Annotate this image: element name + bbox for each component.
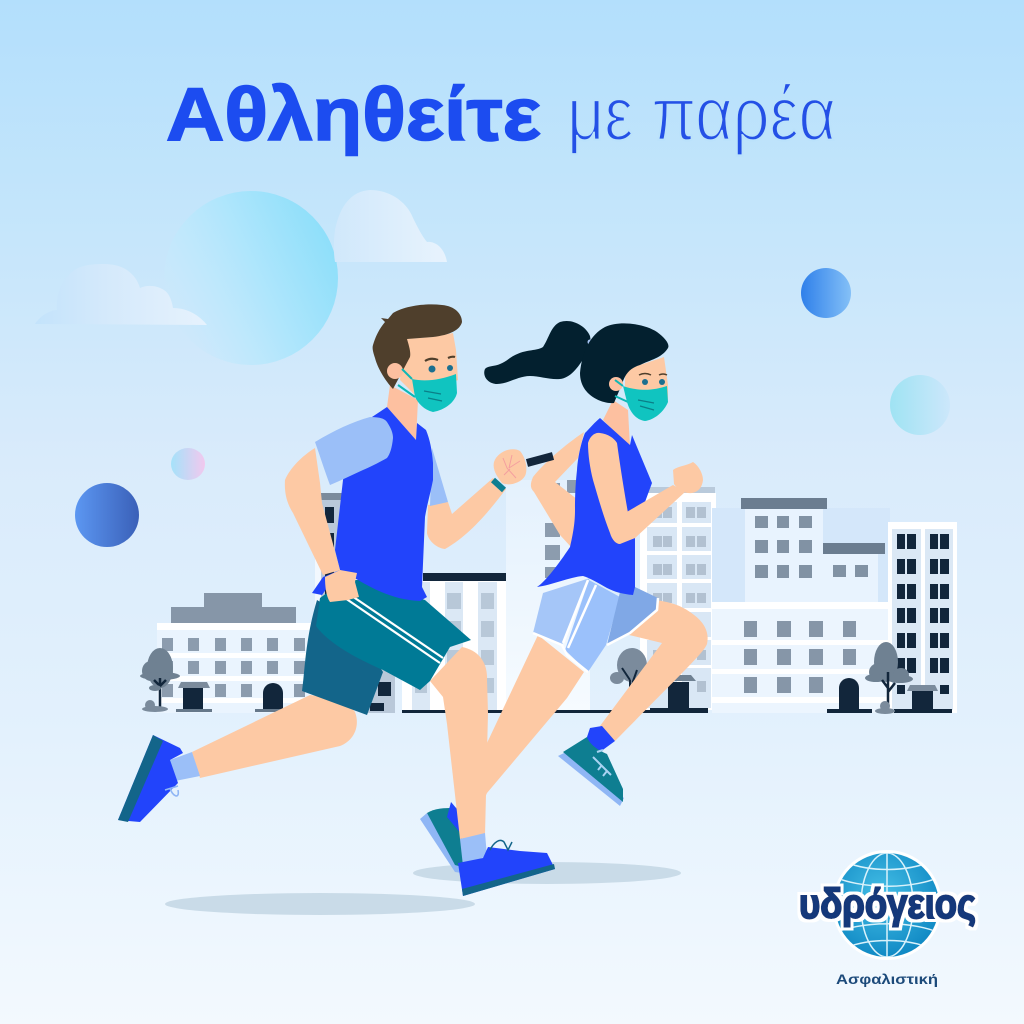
logo wordmark: υδρόγειος bbox=[799, 880, 976, 927]
man sleeve bbox=[315, 417, 393, 485]
woman ponytail bbox=[484, 321, 591, 384]
tree behind woman bbox=[610, 648, 647, 690]
woman shorts bbox=[533, 578, 658, 672]
man back arm bbox=[285, 448, 340, 575]
woman fist bbox=[673, 462, 703, 493]
cloud upper bbox=[334, 190, 447, 262]
shadow under man bbox=[165, 893, 475, 915]
tree left bbox=[140, 648, 180, 712]
woman sock bbox=[585, 726, 615, 752]
man front leg bbox=[430, 647, 488, 839]
man back shoe bbox=[118, 735, 183, 822]
woman front leg bbox=[600, 600, 708, 741]
building: lower wide block bbox=[712, 602, 890, 713]
woman hair bbox=[580, 323, 668, 403]
building: right tower bbox=[888, 522, 957, 713]
woman forearm bbox=[620, 485, 685, 543]
city skyline bbox=[140, 480, 957, 714]
man back leg bbox=[192, 695, 357, 778]
title light part: με παρέα bbox=[567, 72, 836, 156]
building: behind man bbox=[315, 493, 395, 713]
woman neck and face bbox=[603, 357, 668, 447]
man sock front bbox=[460, 833, 487, 866]
logo globe bbox=[830, 850, 944, 960]
building: upper right block bbox=[712, 498, 890, 603]
building: left low block bbox=[157, 593, 317, 713]
building: dark roof block bbox=[402, 573, 507, 711]
man hair bbox=[373, 304, 462, 389]
man runner bbox=[118, 304, 555, 896]
man front arm bbox=[427, 478, 506, 549]
man fist bbox=[494, 449, 526, 484]
man sock bbox=[170, 752, 200, 781]
title bbox=[166, 72, 836, 156]
ground line bbox=[402, 710, 652, 713]
man right sleeve bbox=[430, 448, 448, 506]
woman top bbox=[537, 418, 652, 595]
circle blue right bbox=[801, 268, 851, 318]
woman front shoe bbox=[558, 737, 624, 806]
woman mask bbox=[615, 380, 668, 421]
decorative big circle bbox=[164, 191, 338, 365]
circle pastel left bbox=[171, 448, 205, 480]
woman eyes bbox=[639, 374, 667, 385]
man watch bbox=[493, 480, 504, 490]
circle cyan right bbox=[890, 375, 950, 435]
circle blue left bbox=[75, 483, 139, 547]
title bold part: Αθληθείτε bbox=[166, 72, 541, 156]
man ear bbox=[387, 363, 403, 379]
logo caption: Ασφαλιστική bbox=[836, 971, 938, 987]
man mask bbox=[398, 369, 457, 412]
man vest bbox=[312, 407, 433, 601]
woman arm band bbox=[527, 456, 553, 463]
building: grid facade bbox=[640, 487, 716, 713]
cloud left bbox=[35, 264, 207, 325]
man neck and face bbox=[387, 333, 458, 440]
logo bbox=[799, 850, 976, 987]
woman front arm bbox=[588, 433, 680, 544]
man shorts bbox=[302, 580, 471, 715]
woman back shoe bbox=[420, 802, 470, 873]
woman runner bbox=[420, 321, 708, 873]
woman back arm bbox=[531, 432, 584, 548]
building: tall pale tower bbox=[506, 480, 590, 711]
tree right bbox=[865, 642, 913, 714]
man front shoe bbox=[458, 840, 555, 896]
woman ear bbox=[609, 377, 623, 391]
woman hair band bbox=[590, 342, 594, 352]
woman back leg bbox=[452, 635, 584, 850]
man hand bbox=[325, 570, 359, 602]
man eyes bbox=[425, 357, 455, 372]
shadow under woman bbox=[413, 862, 681, 884]
